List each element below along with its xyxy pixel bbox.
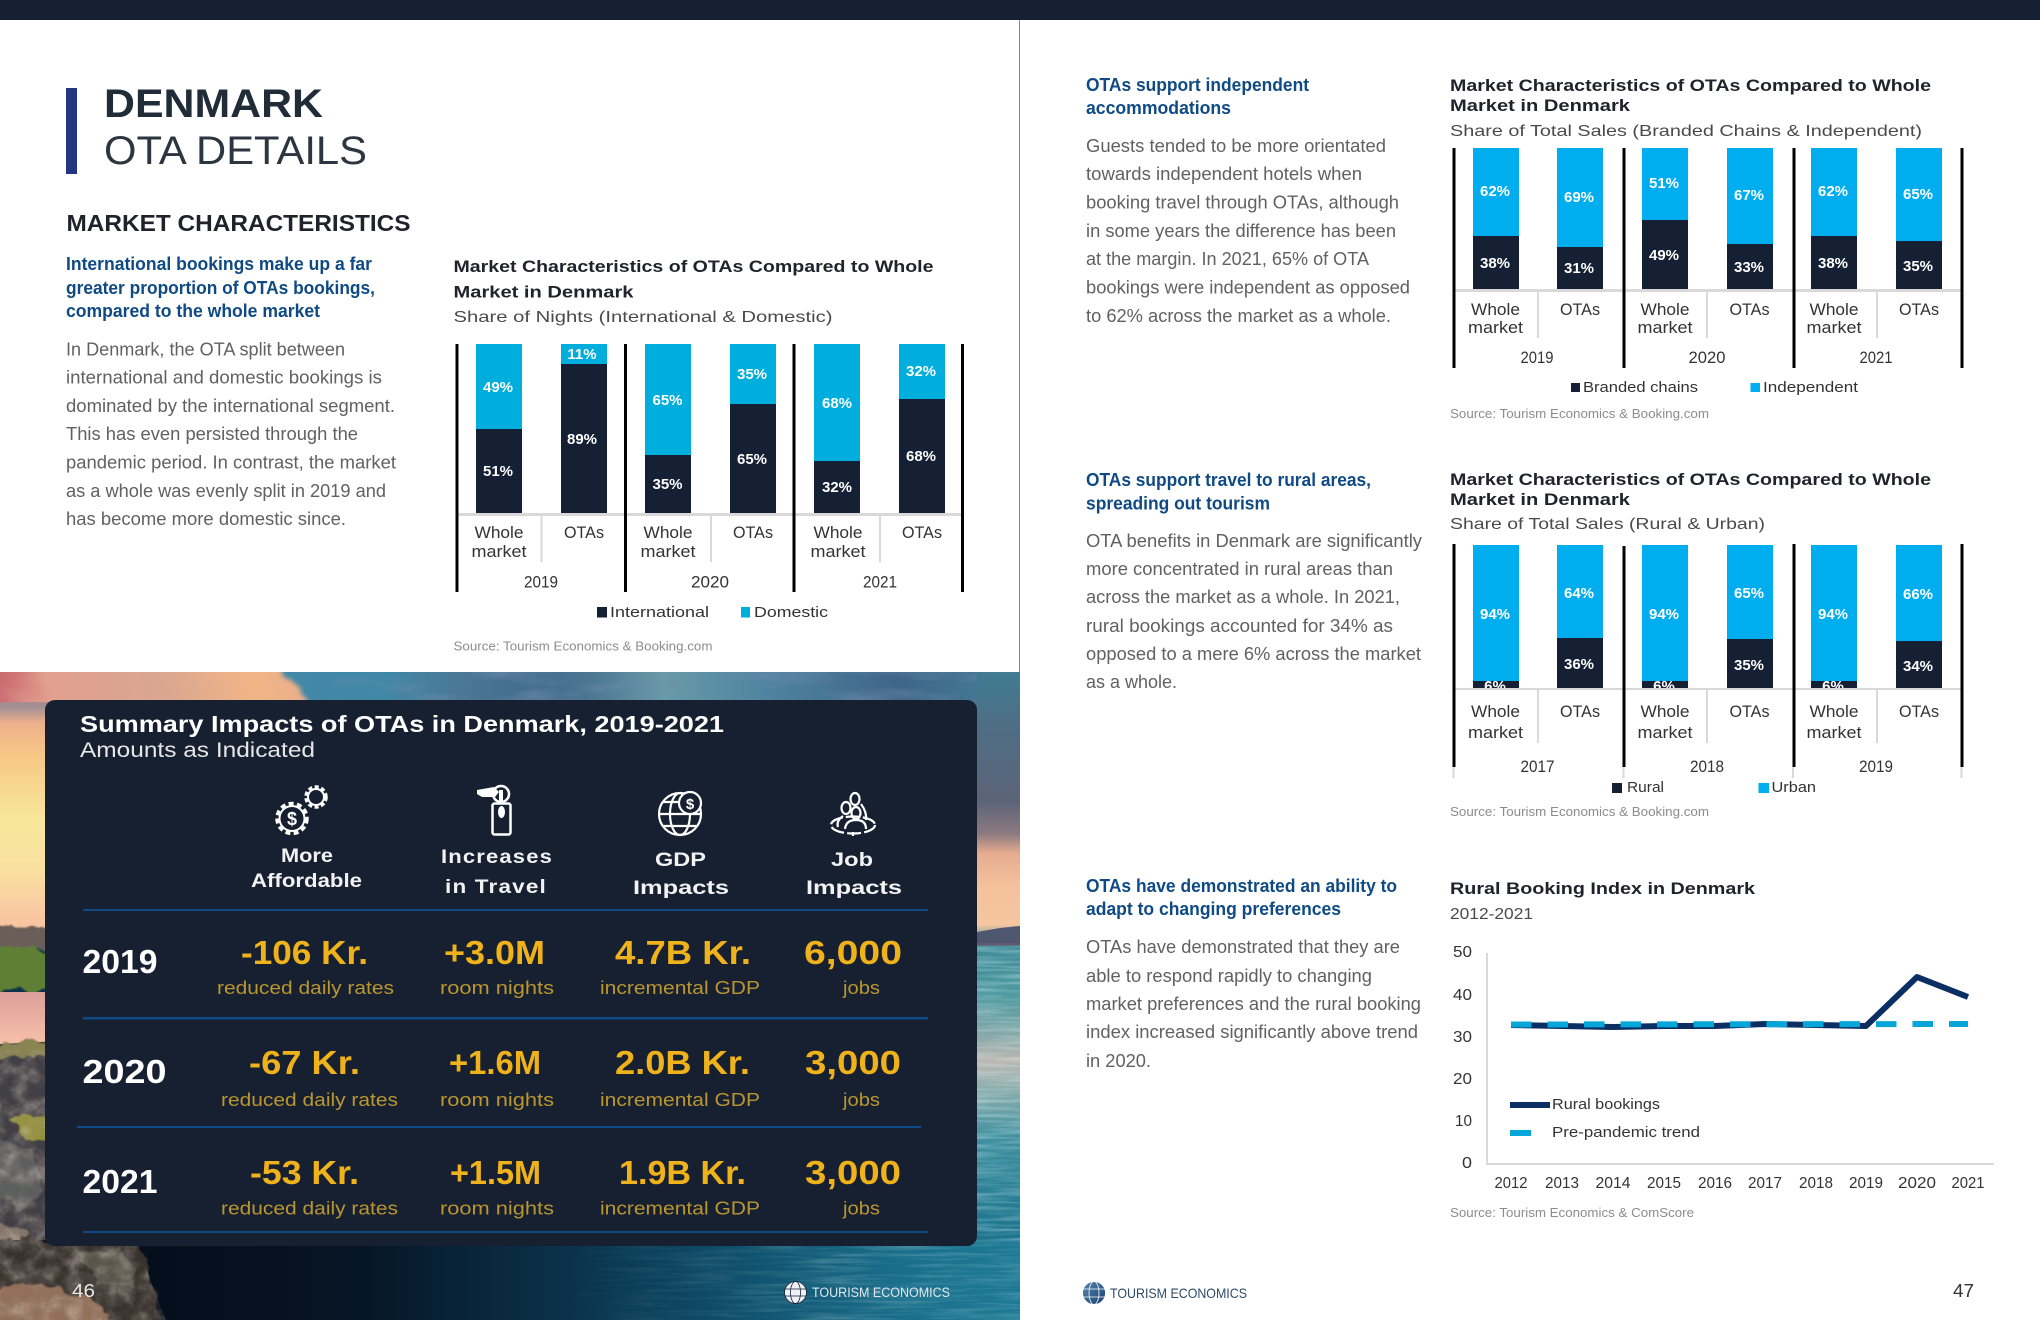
value labels: 65% xyxy=(737,451,767,468)
column label xyxy=(251,846,362,892)
axes: 2017 xyxy=(1748,1175,1782,1192)
category axis: OTAs xyxy=(1730,300,1770,319)
subheading xyxy=(1086,75,1309,118)
category axis: Whole xyxy=(1810,702,1858,721)
subheading xyxy=(1086,470,1371,514)
category axis: market xyxy=(640,542,696,561)
row: 2020: incremental GDP xyxy=(600,1090,760,1110)
top navy band xyxy=(0,0,2040,20)
row: 2020: -67 Kr. xyxy=(249,1044,360,1081)
legend: Branded chains xyxy=(1583,379,1698,396)
summary impacts panel xyxy=(45,700,977,1246)
legend xyxy=(1571,379,1859,396)
category axis: Whole xyxy=(814,523,862,542)
value labels: 68% xyxy=(906,448,936,465)
legend: Rural bookings xyxy=(1552,1096,1660,1113)
value labels: 94% xyxy=(1480,606,1510,623)
chart heading: Market in Denmark xyxy=(1450,96,1631,115)
value labels: 34% xyxy=(1903,658,1933,675)
value labels: 51% xyxy=(483,463,513,480)
icon: people on a target xyxy=(831,793,875,836)
column: increases in travel xyxy=(441,786,553,898)
title accent bar xyxy=(66,88,77,174)
row: 2020: 3,000 xyxy=(805,1044,901,1081)
body copy: in some years the difference has been xyxy=(1086,220,1396,241)
axes: 2020 xyxy=(1898,1175,1936,1192)
subheading xyxy=(1086,876,1397,919)
category axis: market xyxy=(1468,723,1523,742)
text block: international bookings callout: greater proportion of OTAs bookings, xyxy=(66,278,375,298)
source note: Source: Tourism Economics & Booking.com xyxy=(1450,407,1709,421)
panel title xyxy=(80,711,724,762)
body copy: as a whole. xyxy=(1086,671,1177,692)
value labels: 49% xyxy=(1649,247,1679,264)
chart heading xyxy=(1450,879,1756,923)
chart heading: Share of Nights (International & Domestic) xyxy=(454,309,832,326)
category axis: market xyxy=(1638,723,1693,742)
body copy: in 2020. xyxy=(1086,1050,1151,1071)
value labels: 32% xyxy=(906,363,936,380)
row: 2019: +3.0M xyxy=(444,934,545,971)
value labels: 38% xyxy=(1818,255,1848,272)
row: 2019: reduced daily rates xyxy=(217,978,394,998)
category axis: 2021 xyxy=(863,572,897,592)
axes: 2018 xyxy=(1799,1175,1833,1192)
category axis: 2017 xyxy=(1520,757,1554,776)
category axis: OTAs xyxy=(733,523,773,542)
subheading: OTAs support travel to rural areas, xyxy=(1086,470,1371,490)
legend: Urban xyxy=(1772,779,1816,796)
axes: 2013 xyxy=(1545,1175,1579,1192)
category axis: 2020 xyxy=(691,572,729,592)
value labels: 36% xyxy=(1564,656,1594,673)
legend: International xyxy=(610,604,709,621)
stacked bars xyxy=(1473,545,1942,688)
row: 2019: -106 Kr. xyxy=(241,934,368,971)
text block: OTAs support independent accommodations xyxy=(1086,75,1410,326)
row: 2021: 1.9B Kr. xyxy=(619,1154,746,1191)
body copy: across the market as a whole. In 2021, xyxy=(1086,586,1400,607)
category axis: OTAs xyxy=(1560,702,1600,721)
legend: Independent xyxy=(1763,379,1859,396)
row: 2019: incremental GDP xyxy=(600,978,760,998)
chart: share of total sales, branded chains and independent xyxy=(1450,76,1964,421)
axes: 50 xyxy=(1453,944,1472,961)
source note: Source: Tourism Economics & Booking.com xyxy=(1450,805,1709,819)
body copy: at the margin. In 2021, 65% of OTA xyxy=(1086,248,1370,269)
value labels: 33% xyxy=(1734,259,1764,276)
text block: Denmark OTA split: In Denmark, the OTA split between xyxy=(66,338,345,360)
value labels: 62% xyxy=(1818,183,1848,200)
value labels: 62% xyxy=(1480,183,1510,200)
text block: international bookings callout xyxy=(66,254,375,321)
value labels: 66% xyxy=(1903,586,1933,603)
legend: Domestic xyxy=(754,604,829,621)
category axis: Whole xyxy=(1640,300,1690,319)
body copy: opposed to a mere 6% across the market xyxy=(1086,643,1421,664)
background photo: coastal landscape xyxy=(0,650,1020,1320)
category axis: market xyxy=(1638,318,1693,337)
icon: gears with dollar sign: $ xyxy=(287,809,297,829)
dark water, bottom edge xyxy=(0,1240,1020,1320)
body copy: more concentrated in rural areas than xyxy=(1086,558,1393,579)
value labels: 6% xyxy=(1653,678,1675,695)
text block: OTAs adapt to changing preferences xyxy=(1086,876,1421,1071)
row: 2021: room nights xyxy=(440,1198,554,1218)
category axis: OTAs xyxy=(1730,702,1770,721)
stacked bars xyxy=(1473,148,1942,289)
value labels: 6% xyxy=(1484,678,1506,695)
column label xyxy=(633,850,729,899)
column: job impacts xyxy=(806,793,902,899)
category axis xyxy=(1452,148,1964,368)
title line 1: DENMARK xyxy=(104,82,323,126)
row: 2020: 2.0B Kr. xyxy=(615,1044,750,1081)
category axis: market xyxy=(472,542,527,561)
category axis: OTAs xyxy=(1899,702,1939,721)
axes: 2016 xyxy=(1698,1175,1732,1192)
title line 2: OTA DETAILS xyxy=(104,129,367,173)
axes xyxy=(1453,944,1994,1192)
value labels: 35% xyxy=(1903,258,1933,275)
subheading: spreading out tourism xyxy=(1086,494,1270,514)
logo: Tourism Economics, left page: TOURISM ECONOMICS xyxy=(812,1285,950,1300)
value labels: 69% xyxy=(1564,189,1594,206)
value labels: 11% xyxy=(567,346,597,363)
category axis: 2019 xyxy=(1859,757,1893,776)
row: 2021: incremental GDP xyxy=(600,1198,760,1218)
row: 2019: jobs xyxy=(842,978,880,998)
value labels: 65% xyxy=(652,392,683,409)
chart: share of total sales, rural and urban xyxy=(1450,470,1964,819)
chart heading: Rural Booking Index in Denmark xyxy=(1450,879,1756,898)
axes: 30 xyxy=(1453,1029,1472,1046)
value labels: 94% xyxy=(1649,606,1679,623)
subheading: OTAs support independent xyxy=(1086,75,1309,95)
axes: 20 xyxy=(1453,1071,1472,1088)
column label: Job xyxy=(831,850,873,871)
text block: Denmark OTA split: dominated by the international segment. xyxy=(66,395,395,416)
icon: globe with coin: $ xyxy=(686,796,695,813)
panel title: Amounts as Indicated xyxy=(80,739,315,762)
row: 2021 xyxy=(82,1154,901,1218)
value labels: 32% xyxy=(822,479,852,496)
column: more affordable xyxy=(251,787,362,892)
body copy: index increased significantly above trend xyxy=(1086,1021,1418,1042)
value labels: 67% xyxy=(1734,187,1764,204)
category axis: market xyxy=(1806,318,1862,337)
row: 2020: 2020 xyxy=(82,1053,166,1090)
value labels xyxy=(1480,585,1933,695)
chart heading: Market in Denmark xyxy=(454,282,634,302)
column label: GDP xyxy=(655,850,706,871)
text block: Denmark OTA split: This has even persisted through the xyxy=(66,423,358,444)
column label: More xyxy=(281,846,333,867)
row: 2020: +1.6M xyxy=(449,1044,541,1081)
row: 2021: reduced daily rates xyxy=(221,1198,398,1218)
body copy: OTAs have demonstrated that they are xyxy=(1086,936,1400,957)
category axis: Whole xyxy=(644,523,692,542)
logo: Tourism Economics, right page xyxy=(1082,1282,1247,1304)
sea and headland, right edge xyxy=(973,672,1020,1240)
category axis: 2019 xyxy=(1520,348,1554,367)
axes: 10 xyxy=(1455,1113,1472,1130)
body copy: market preferences and the rural booking xyxy=(1086,993,1421,1014)
chart: rural booking index line chart xyxy=(1450,879,1994,1220)
chart heading: Share of Total Sales (Rural & Urban) xyxy=(1450,516,1765,533)
column: GDP impacts xyxy=(633,792,729,899)
axes: 2019 xyxy=(1849,1175,1883,1192)
category axis xyxy=(1452,544,1964,778)
body copy: bookings were independent as opposed xyxy=(1086,276,1410,298)
text block: Denmark OTA split: pandemic period. In contrast, the market xyxy=(66,452,396,472)
row: 2020 xyxy=(82,1044,901,1110)
value labels: 49% xyxy=(483,379,513,396)
row: 2019 xyxy=(82,934,902,998)
value labels: 38% xyxy=(1480,255,1510,272)
row: 2019: 2019 xyxy=(82,943,158,980)
category axis: 2020 xyxy=(1688,348,1726,367)
chart: share of nights, international and domestic xyxy=(454,257,964,654)
value labels: 94% xyxy=(1818,606,1848,623)
body copy: towards independent hotels when xyxy=(1086,163,1362,184)
legend xyxy=(597,604,829,621)
source note: Source: Tourism Economics & ComScore xyxy=(1450,1206,1694,1220)
category axis: 2019 xyxy=(524,572,558,592)
value labels xyxy=(1480,175,1933,277)
column label: Impacts xyxy=(633,878,729,899)
stacked bars xyxy=(476,344,945,513)
value labels: 65% xyxy=(1734,585,1764,602)
cliff, bottom left xyxy=(0,1050,170,1320)
source note: Source: Tourism Economics & Booking.com xyxy=(454,640,712,654)
axes: 2014 xyxy=(1596,1175,1631,1192)
axes: 2021 xyxy=(1952,1175,1985,1192)
chart heading: 2012-2021 xyxy=(1450,906,1533,923)
body copy xyxy=(1086,135,1410,326)
chart heading: Market in Denmark xyxy=(1450,490,1631,509)
row: 2019: 6,000 xyxy=(804,934,902,971)
category axis: OTAs xyxy=(1560,300,1600,319)
subheading: adapt to changing preferences xyxy=(1086,899,1341,919)
clouds, top edge xyxy=(0,672,977,702)
line: pre-pandemic trend xyxy=(1511,1021,1968,1028)
row: 2021: 3,000 xyxy=(805,1154,901,1191)
text block: OTAs support travel to rural areas xyxy=(1086,470,1423,692)
row: 2021: jobs xyxy=(842,1198,880,1218)
value labels: 64% xyxy=(1564,585,1594,602)
sky and land, left edge xyxy=(0,702,49,1240)
row: 2021: +1.5M xyxy=(450,1154,541,1191)
text block: Denmark OTA split: international and domestic bookings is xyxy=(66,366,382,388)
row: 2021: -53 Kr. xyxy=(250,1154,359,1191)
text block: Denmark OTA split: as a whole was evenly split in 2019 and xyxy=(66,480,386,501)
body copy: rural bookings accounted for 34% as xyxy=(1086,615,1393,636)
body copy xyxy=(1086,530,1423,692)
category axis: Whole xyxy=(1640,702,1690,721)
category axis: market xyxy=(1468,318,1523,337)
legend xyxy=(1510,1096,1700,1141)
value labels: 68% xyxy=(822,395,852,412)
legend: Rural xyxy=(1627,779,1664,796)
row: 2020: room nights xyxy=(440,1090,554,1110)
legend: Pre-pandemic trend xyxy=(1552,1124,1700,1141)
category axis: OTAs xyxy=(902,523,942,542)
text block: Denmark OTA split: has become more domestic since. xyxy=(66,508,346,529)
page title: Denmark OTA Details xyxy=(66,82,367,174)
value labels: 31% xyxy=(1564,260,1594,277)
body copy: booking travel through OTAs, although xyxy=(1086,192,1399,212)
chart heading: Market Characteristics of OTAs Compared to Whole xyxy=(1450,76,1931,95)
column label: in Travel xyxy=(445,877,547,898)
text block: international bookings callout: compared to the whole market xyxy=(66,301,320,321)
value labels: 89% xyxy=(567,431,597,448)
row dividers xyxy=(77,909,928,1233)
row: 2021: 2021 xyxy=(82,1163,158,1200)
body copy: able to respond rapidly to changing xyxy=(1086,965,1372,986)
column label: Increases xyxy=(441,847,553,868)
row: 2020: jobs xyxy=(842,1090,880,1110)
category axis: 2021 xyxy=(1860,348,1892,367)
column label xyxy=(806,850,902,899)
icon: hand and phone xyxy=(477,786,510,834)
row: 2019: room nights xyxy=(440,978,554,998)
category axis: OTAs xyxy=(564,523,604,542)
category axis: Whole xyxy=(1471,300,1520,319)
axes: 0 xyxy=(1462,1155,1472,1172)
category axis: market xyxy=(810,542,866,561)
logo: Tourism Economics, right page: TOURISM ECONOMICS xyxy=(1110,1285,1247,1301)
column label: Impacts xyxy=(806,878,902,899)
row: 2019: 4.7B Kr. xyxy=(615,934,751,971)
body copy: Guests tended to be more orientated xyxy=(1086,135,1386,156)
axes: 40 xyxy=(1453,987,1472,1004)
category axis: Whole xyxy=(1810,300,1858,319)
axes: 2012 xyxy=(1494,1175,1528,1192)
chart heading xyxy=(1450,76,1931,140)
body copy: OTA benefits in Denmark are significantly xyxy=(1086,530,1423,551)
subheading: OTAs have demonstrated an ability to xyxy=(1086,876,1397,896)
subheading: accommodations xyxy=(1086,98,1231,118)
chart heading: Market Characteristics of OTAs Compared to Whole xyxy=(1450,470,1931,489)
page number 47: 47 xyxy=(1953,1281,1974,1301)
column label xyxy=(441,847,553,898)
category axis: Whole xyxy=(1471,702,1520,721)
chart heading xyxy=(454,257,934,326)
row: 2020: reduced daily rates xyxy=(221,1090,398,1110)
value labels: 35% xyxy=(737,366,767,383)
line: rural bookings xyxy=(1511,977,1968,1027)
legend xyxy=(1612,779,1816,796)
value labels: 65% xyxy=(1903,186,1933,203)
panel title: Summary Impacts of OTAs in Denmark, 2019-2021 xyxy=(80,711,724,737)
chart heading: Share of Total Sales (Branded Chains & Independent) xyxy=(1450,123,1922,140)
value labels: 35% xyxy=(1734,657,1764,674)
section heading: market characteristics: MARKET CHARACTERISTICS xyxy=(66,210,411,236)
body copy: to 62% across the market as a whole. xyxy=(1086,305,1391,326)
value labels xyxy=(483,346,936,496)
body copy xyxy=(1086,936,1421,1071)
chart heading xyxy=(1450,470,1931,533)
chart heading: Market Characteristics of OTAs Compared to Whole xyxy=(454,257,934,276)
value labels: 6% xyxy=(1822,678,1844,695)
value labels: 35% xyxy=(652,476,683,493)
category axis: 2018 xyxy=(1690,757,1724,776)
column label: Affordable xyxy=(251,871,362,892)
text block: Denmark OTA split xyxy=(66,338,396,529)
category axis xyxy=(456,344,964,592)
logo: Tourism Economics, left page xyxy=(784,1282,950,1304)
text block: international bookings callout: International bookings make up a far xyxy=(66,254,372,274)
category axis: Whole xyxy=(474,523,524,542)
category axis: OTAs xyxy=(1899,300,1939,319)
page number 46: 46 xyxy=(72,1281,95,1301)
category axis: market xyxy=(1806,723,1862,742)
value labels: 51% xyxy=(1649,175,1679,192)
axes: 2015 xyxy=(1647,1175,1681,1192)
